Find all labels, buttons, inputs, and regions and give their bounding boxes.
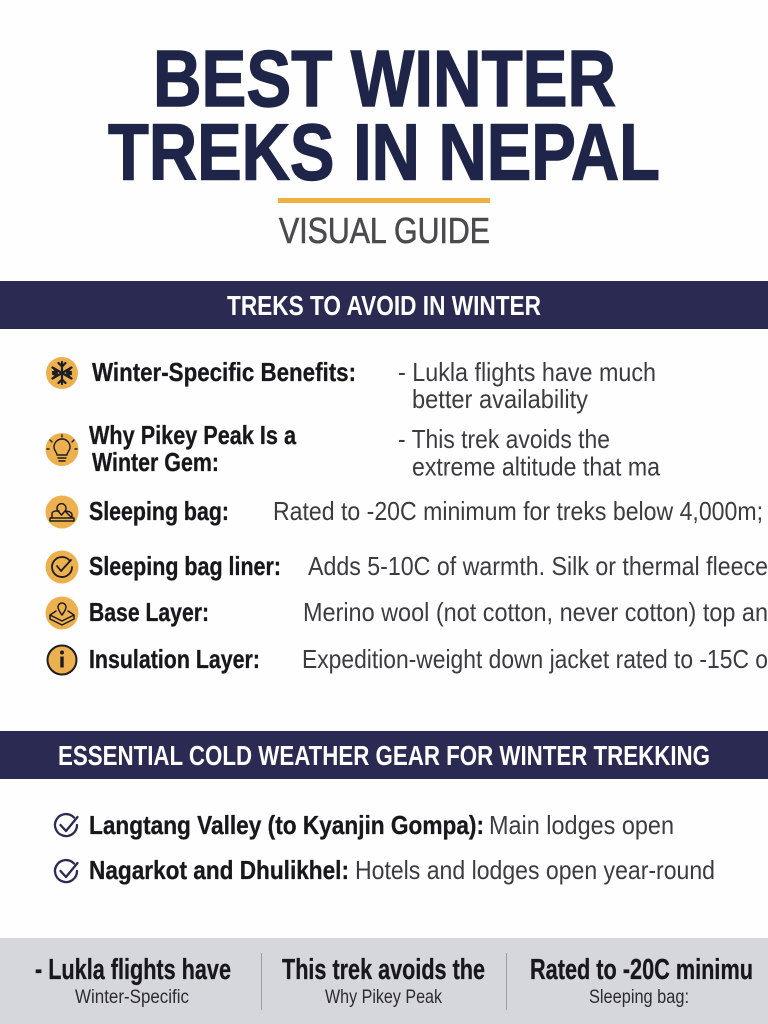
stat: trek avoids: Why Pikey Peak [325,987,442,1008]
icon: light bulb [46,433,78,466]
item: nagarkot and dhulikhel [55,855,715,885]
panel: winter details list [46,357,768,674]
stat: trek avoids: This trek avoids the [282,954,485,986]
row: why pikey peak: Winter Gem: [92,447,219,477]
icon: info [48,646,76,674]
row: sleeping bag [46,496,763,528]
section banner: treks to avoid [0,281,768,329]
row: base layer [46,596,768,630]
icon: snowflake [46,357,78,389]
item: nagarkot and dhulikhel: Hotels and lodges open year-round [355,855,715,885]
title accent rule [278,198,490,203]
stat: trek avoids [282,954,485,1008]
row: sleeping bag liner: Sleeping bag liner: [89,551,281,581]
icon: check [55,814,78,836]
icon: check circle [46,550,78,584]
item: langtang valley: Main lodges open [489,810,674,840]
title: TREKS IN NEPAL [108,108,660,196]
row: sleeping bag liner [46,550,768,584]
row: insulation layer [48,644,768,674]
section banner: essential gear [0,731,768,779]
footer stats strip [0,938,768,1024]
stat: lukla flights [35,954,231,1008]
row: why pikey peak [46,420,660,482]
row: winter-specific benefits: - Lukla flights have much [398,357,656,387]
section banner: treks to avoid: TREKS TO AVOID IN WINTER [227,290,541,321]
stat: lukla flights: Winter-Specific [75,987,189,1008]
row: why pikey peak: Why Pikey Peak Is a [89,420,296,450]
row: insulation layer: Insulation Layer: [89,644,260,674]
row: winter-specific benefits: Winter-Specific Benefits: [92,357,356,387]
stat: rated to -20C [530,954,753,1008]
subtitle: VISUAL GUIDE [279,210,490,251]
row: base layer: Base Layer: [89,597,209,627]
icon: check [55,860,78,882]
stat: rated to -20C: Sleeping bag: [589,987,689,1008]
icon: map pin on layers [46,596,78,630]
item: langtang valley: Langtang Valley (to Kyanjin Gompa): [89,810,484,840]
row: sleeping bag: Sleeping bag: [89,496,229,526]
icon: sleeping bag [46,496,78,528]
row: winter-specific benefits: better availability [412,384,588,414]
title: BEST WINTER [153,34,616,123]
row: why pikey peak: extreme altitude that ma [412,452,660,482]
panel: checklist [55,810,715,885]
row: why pikey peak: - This trek avoids the [398,424,610,454]
stat: lukla flights: - Lukla flights have [35,954,231,986]
row: winter-specific benefits [46,357,656,414]
item: nagarkot and dhulikhel: Nagarkot and Dhulikhel: [89,855,349,885]
title [108,34,660,196]
